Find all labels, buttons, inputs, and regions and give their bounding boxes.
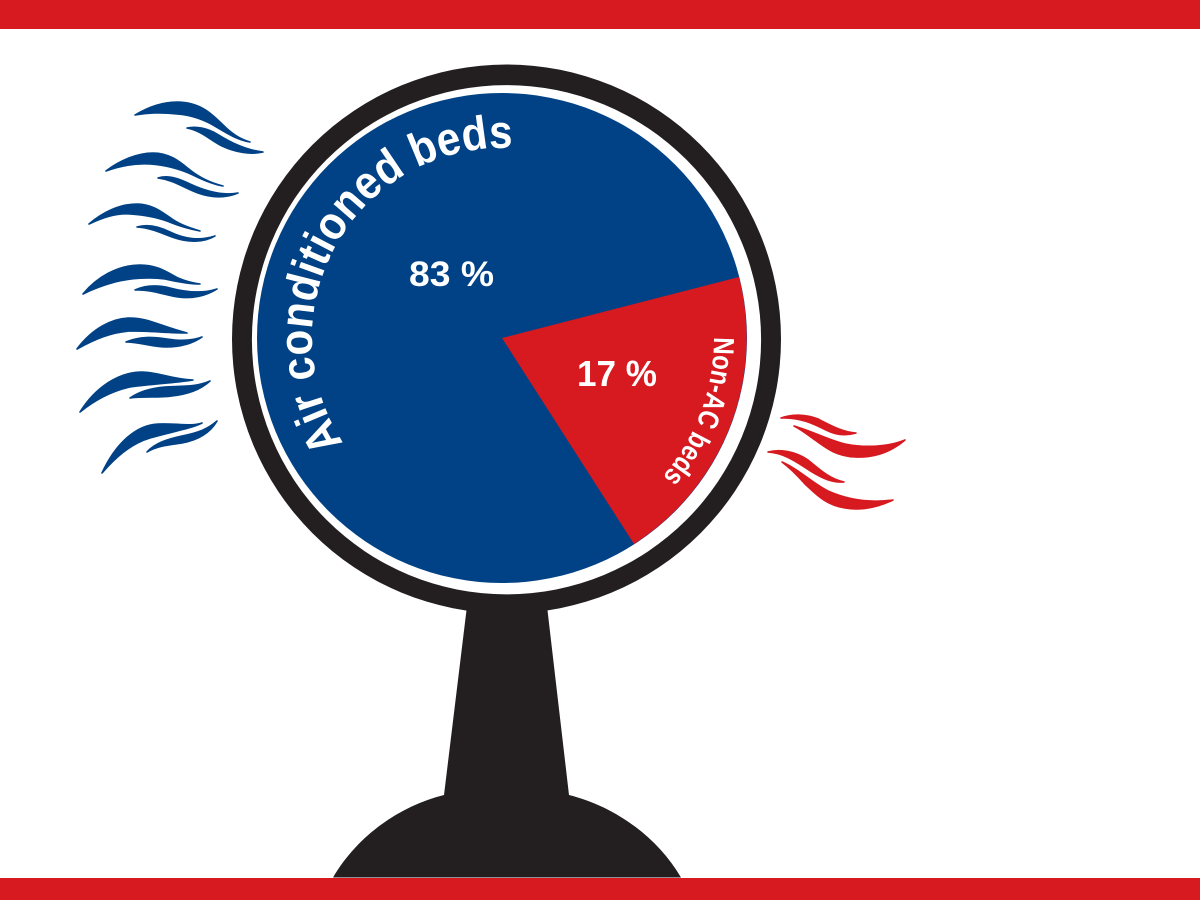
- value: 83 %: 83 %: [409, 255, 494, 294]
- pie chart: [257, 93, 747, 583]
- pie slice: air conditioned beds 83%: [257, 93, 747, 583]
- icon: cool air wisps: [77, 102, 263, 473]
- label: Air conditioned beds: Air conditioned beds: [286, 114, 511, 449]
- bottom red band: [0, 878, 1200, 900]
- icon: warm air wisps: [768, 415, 905, 509]
- fan stand and base: [333, 606, 681, 878]
- label: Non-AC beds: Non-AC beds: [664, 338, 734, 484]
- pie slice: non-AC beds 17%: [502, 277, 747, 544]
- value: 17 %: 17 %: [577, 353, 657, 394]
- fan outer ring: [232, 64, 781, 614]
- top red band: [0, 0, 1200, 29]
